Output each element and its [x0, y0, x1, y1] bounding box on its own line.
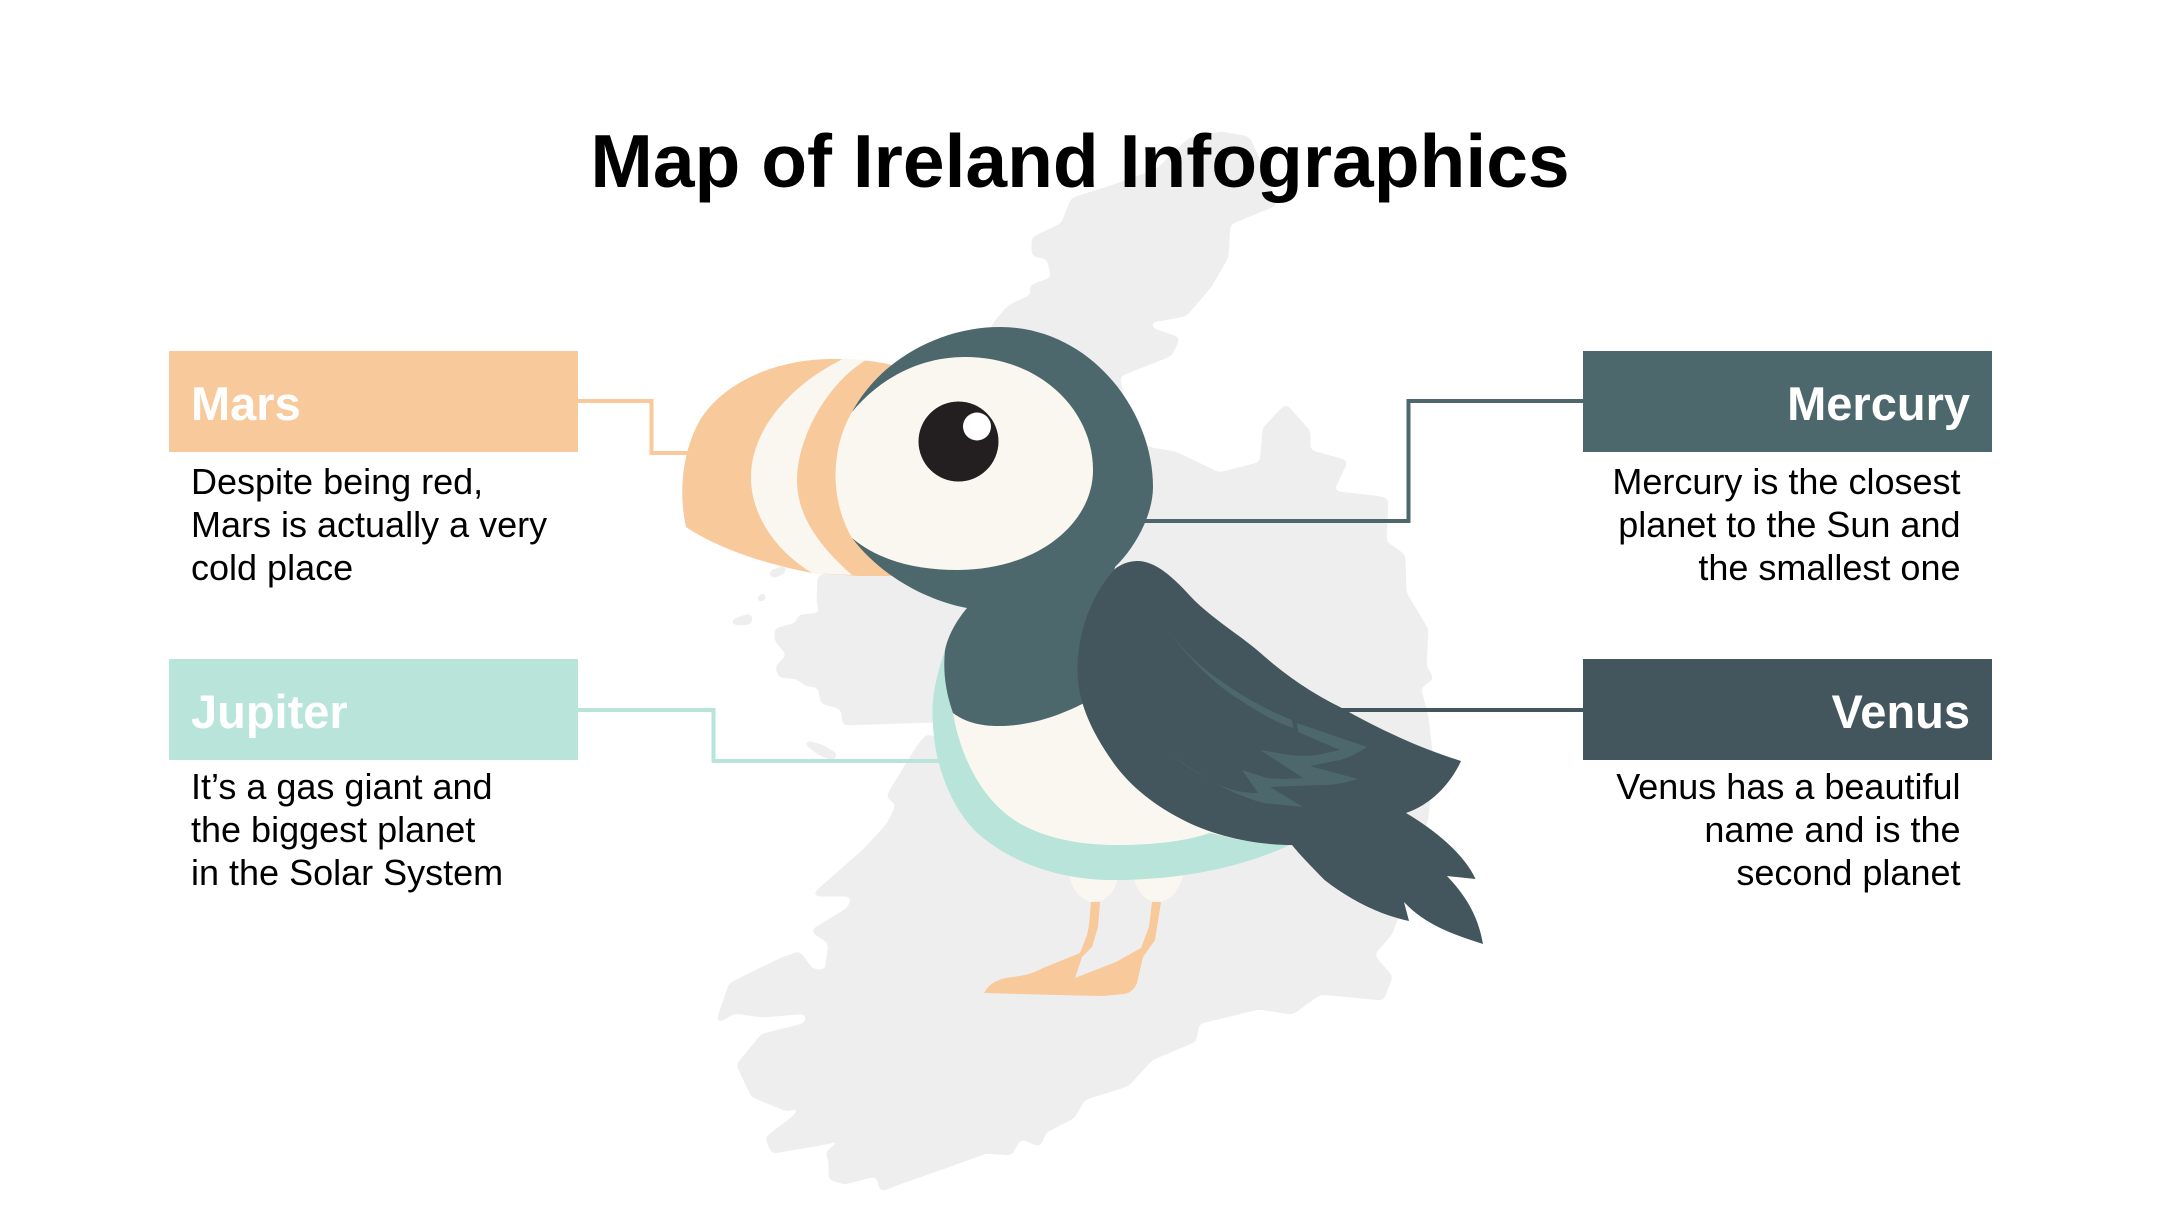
connector: Jupiter: [578, 710, 945, 761]
puffin illustration: [682, 327, 1483, 996]
puffin beak: [682, 359, 900, 576]
puffin legs and feet: [984, 902, 1161, 996]
puffin head and chest: [852, 327, 1153, 726]
description: Jupiter: in the Solar System: [191, 852, 503, 893]
label box: Mars: [169, 351, 578, 452]
description: Jupiter: the biggest planet: [191, 809, 475, 850]
description: Mercury: [1612, 461, 1960, 588]
connector: Venus: [1335, 708, 1583, 712]
puffin belly cream: [953, 700, 1240, 845]
description: Jupiter: It’s a gas giant and: [191, 766, 493, 807]
map of Ireland: [719, 134, 1431, 1189]
description: Mercury: planet to the Sun and: [1618, 504, 1960, 545]
description: Mars: Despite being red,: [191, 461, 483, 502]
label box: Mars: Mars: [191, 377, 301, 430]
description: Mercury: Mercury is the closest: [1612, 461, 1960, 502]
label box: Venus: Venus: [1832, 685, 1970, 738]
description: Jupiter: [191, 766, 503, 893]
description: Mars: cold place: [191, 547, 353, 588]
wing feather details: [1147, 630, 1367, 807]
description: Venus: name and is the: [1704, 809, 1960, 850]
description: Venus: second planet: [1736, 852, 1960, 893]
puffin wing and tail: [1077, 561, 1483, 944]
puffin belly mint: [932, 650, 1290, 880]
label box: Jupiter: [169, 659, 578, 760]
puffin eye: [836, 357, 1093, 570]
puffin thighs: [1069, 872, 1184, 902]
label box: Mercury: Mercury: [1787, 377, 1970, 430]
label box: Mercury: [1583, 351, 1992, 452]
description: Mercury: the smallest one: [1698, 547, 1960, 588]
description: Mars: [191, 461, 547, 588]
description: Mars: Mars is actually a very: [191, 504, 547, 545]
description: Venus: Venus has a beautiful: [1616, 766, 1960, 807]
label box: Venus: [1583, 659, 1992, 760]
title: Map of Ireland Infographics: [590, 118, 1570, 202]
connector: Mars: [578, 401, 692, 453]
connector: Mercury: [1140, 401, 1583, 521]
label box: Jupiter: Jupiter: [191, 685, 348, 738]
description: Venus: [1616, 766, 1960, 893]
